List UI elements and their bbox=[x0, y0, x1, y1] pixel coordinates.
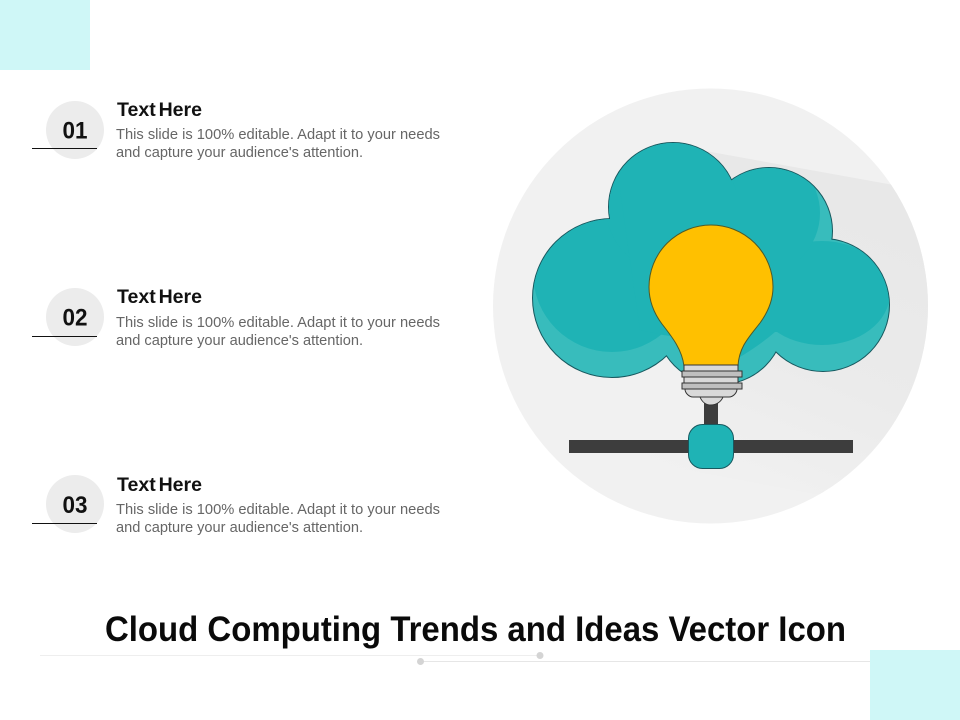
top-left corner accent bbox=[0, 0, 90, 70]
cloud bbox=[533, 141, 890, 384]
description 03: This slide is 100% editable. Adapt it to your needs bbox=[116, 502, 440, 518]
network node bbox=[688, 424, 734, 468]
description 02: This slide is 100% editable. Adapt it to your needs bbox=[116, 315, 440, 331]
description 03: and capture your audience's attention. bbox=[116, 520, 363, 536]
number badge 01 bbox=[32, 101, 104, 159]
item 01 bbox=[32, 100, 440, 161]
description 01: This slide is 100% editable. Adapt it to your needs bbox=[116, 127, 440, 143]
title: Cloud Computing Trends and Ideas Vector Icon bbox=[105, 610, 846, 649]
background circle bbox=[493, 88, 928, 524]
network stem bbox=[704, 403, 718, 427]
number badge 01: 01 bbox=[62, 118, 88, 144]
network bar bbox=[569, 440, 853, 453]
heading 01: Text Here bbox=[117, 100, 202, 121]
title underline decoration bbox=[40, 652, 870, 665]
long shadow bbox=[708, 152, 928, 322]
bottom-right corner accent bbox=[870, 650, 960, 720]
number badge 03: 03 bbox=[62, 492, 88, 519]
illustration: cloud network light bulb bbox=[493, 88, 960, 524]
number badge 02 bbox=[32, 288, 104, 346]
number badge 02: 02 bbox=[62, 304, 88, 332]
item 03 bbox=[32, 475, 440, 536]
heading 03: Text Here bbox=[117, 475, 202, 496]
heading 02: Text Here bbox=[117, 287, 202, 308]
light bulb bbox=[649, 225, 773, 405]
item 02 bbox=[32, 287, 440, 349]
description 02: and capture your audience's attention. bbox=[116, 333, 363, 349]
number badge 03 bbox=[32, 475, 104, 533]
description 01: and capture your audience's attention. bbox=[116, 145, 363, 161]
